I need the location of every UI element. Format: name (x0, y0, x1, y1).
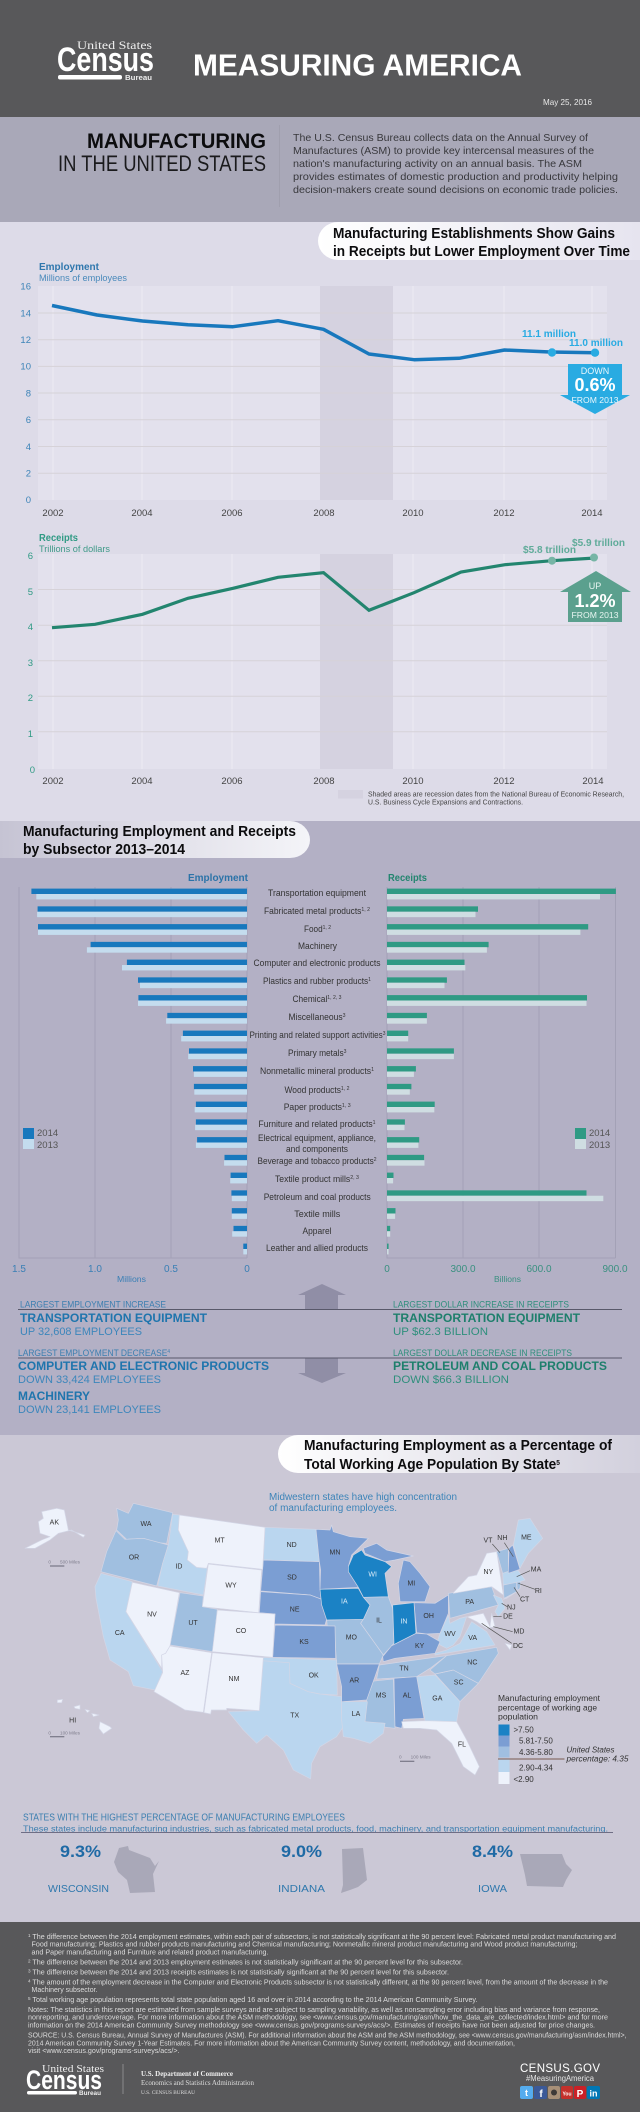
choropleth map of US states: AK (50, 1520, 59, 1527)
chart: receipts line: Trillions of dollars (39, 544, 110, 554)
map legend: 2.90-4.34 (519, 1764, 553, 1772)
choropleth map of US states: VA (468, 1635, 477, 1642)
choropleth map of US states: IA (341, 1598, 348, 1605)
choropleth map of US states: ND (287, 1542, 297, 1549)
footnotes: SOURCE: U.S. Census Bureau, Annual Survey of Manufactures (ASM). For additional information about the ASM and the ASM methodology, see <www.census.gov/manufacturing/asm/index.html>, (28, 2032, 627, 2040)
intro text: nation's manufacturing activity on an annual basis. The ASM (293, 158, 582, 170)
choropleth map of US states: WY (225, 1583, 237, 1590)
choropleth map of US states: MD (514, 1629, 524, 1636)
callouts: receipts changes: LARGEST DOLLAR DECREASE IN RECEIPTS (393, 1348, 572, 1358)
chart: receipts line: 0 (30, 765, 35, 776)
choropleth map of US states: OK (309, 1672, 319, 1679)
choropleth map of US states: MN (330, 1550, 340, 1557)
stat: Iowa: IOWA (478, 1883, 507, 1895)
legend: receipts years: 2014 (589, 1128, 610, 1139)
intro text: Manufactures (ASM) to provide key intercensal measures of the (293, 145, 594, 157)
map legend (498, 1694, 629, 1784)
stat: Indiana: INDIANA (278, 1883, 325, 1895)
stat: Wisconsin: WISCONSIN (48, 1883, 109, 1895)
intro text: provides estimates of domestic production and productivity helping (293, 171, 618, 183)
highest-share states (21, 1812, 613, 1895)
map legend: Manufacturing employment (498, 1694, 601, 1703)
footnotes: The difference between the 2014 and 2013 receipts estimates is not statistically significant at the 90 percent level for this subsector. (31, 1970, 449, 1976)
choropleth map of US states: CO (236, 1628, 247, 1635)
callouts: employment changes: COMPUTER AND ELECTRONIC PRODUCTS (18, 1359, 269, 1373)
map legend: 4.36-5.80 (519, 1748, 553, 1757)
intro heading: MANUFACTURING (87, 130, 266, 153)
subsector labels: Nonmetallic mineral products (260, 1066, 376, 1076)
choropleth map of US states: CT (520, 1596, 530, 1603)
chart: employment line: 12 (20, 335, 31, 346)
chart: receipts line: 2012 (493, 776, 515, 787)
chart: employment bars: 0 (244, 1264, 250, 1275)
footnotes (28, 1933, 627, 2055)
website and hashtag: CENSUS.GOV (520, 2063, 600, 2075)
subsector labels: 3 (383, 1031, 385, 1037)
arrow: receipts up 1.2% (560, 571, 631, 622)
subsector labels: Miscellaneous (288, 1012, 346, 1022)
footnotes: 4 (28, 1978, 31, 1984)
choropleth map of US states: ME (521, 1534, 532, 1541)
heading: subsector (0, 821, 310, 858)
chart: receipts line: 1 (28, 729, 33, 740)
chart: employment line: 2014 (581, 508, 603, 519)
subsector labels: Electrical equipment, appliance, (258, 1133, 376, 1143)
arrow: receipts up 1.2%: UP (589, 581, 601, 591)
choropleth map of US states: 0 (399, 1755, 402, 1760)
callouts: employment changes: UP 32,608 EMPLOYEES (20, 1326, 142, 1338)
chart: receipts line: 6 (28, 551, 33, 562)
callouts: employment changes: LARGEST EMPLOYMENT INCREASE (20, 1300, 166, 1310)
website and hashtag: #MeasuringAmerica (526, 2074, 595, 2083)
choropleth map of US states: MO (346, 1635, 358, 1642)
choropleth map of US states: NH (497, 1535, 507, 1542)
subsector labels: Plastics and rubber products (263, 976, 377, 986)
callouts: employment changes (18, 1300, 269, 1416)
chart: receipts line (28, 533, 625, 787)
chart: employment line: 2004 (131, 508, 153, 519)
callouts: employment changes: 4 (167, 1349, 170, 1355)
choropleth map of US states: KS (299, 1639, 309, 1646)
choropleth map of US states: UT (188, 1620, 198, 1627)
icons: social media (520, 2086, 600, 2100)
logo: Census Bureau: United States (77, 40, 153, 52)
arrow: employment down 0.6%: DOWN (581, 366, 609, 376)
chart: employment line: 2 (26, 468, 31, 480)
chart: receipts line: 2010 (402, 776, 424, 787)
chart: receipts bars: 600.0 (526, 1264, 552, 1275)
chart: employment bars: Millions (117, 1274, 146, 1284)
subsector labels: Leather and allied products (266, 1243, 368, 1253)
choropleth map of US states: NE (290, 1607, 300, 1614)
choropleth map of US states: GA (432, 1696, 443, 1703)
chart: receipts line: 4 (28, 622, 33, 633)
heading: trends: Manufacturing Establishments Show Gains (333, 226, 615, 242)
chart: receipts line: 3 (28, 658, 33, 669)
heading: map: Total Working Age Population By State (304, 1457, 571, 1473)
choropleth map of US states: VT (484, 1538, 493, 1545)
subsector labels: Transportation equipment (268, 888, 366, 898)
choropleth map of US states: OR (129, 1554, 139, 1561)
legend: employment years (23, 1128, 58, 1151)
subsector labels: Printing and related support activities (250, 1030, 397, 1040)
chart: employment line: 11.0 million (569, 338, 623, 349)
subsector labels: Beverage and tobacco products (258, 1156, 385, 1166)
choropleth map of US states: 100 Miles (60, 1731, 81, 1736)
chart: employment bars: 1.5 (12, 1264, 26, 1275)
chart: receipts line: 2 (28, 693, 33, 704)
icons: social media: in (590, 2088, 598, 2098)
choropleth map of US states: MI (407, 1580, 415, 1587)
subsector labels: Food (304, 924, 325, 934)
title: MEASURING AMERICA (193, 48, 522, 82)
callouts: employment changes: MACHINERY (18, 1389, 90, 1403)
footnotes: Notes: The statistics in this report are estimated from sample surveys and are subject to sampling variability, as well as nonsampling error including bias and variance from response, (28, 2007, 600, 2014)
choropleth map of US states: NV (147, 1612, 157, 1619)
recession legend (338, 790, 624, 806)
choropleth map of US states: AL (403, 1692, 411, 1699)
chart: employment line: 6 (26, 415, 31, 426)
subsector labels: 2 (374, 1157, 376, 1163)
logo: Census Bureau: Census (57, 41, 154, 79)
subsector labels: Paper products (284, 1102, 345, 1112)
chart: receipts line: 2014 (582, 776, 604, 787)
choropleth map of US states: 0 (48, 1560, 51, 1565)
chart: receipts line: $5.9 trillion (572, 538, 625, 549)
recession legend: U.S. Business Cycle Expansions and Contractions. (368, 800, 523, 806)
legend: receipts years: 2013 (589, 1140, 610, 1151)
map legend: percentage: 4.35 (565, 1754, 629, 1764)
subsector labels: 1, 3 (342, 1103, 351, 1109)
chart: receipts bars: Receipts (388, 872, 427, 884)
intro text (293, 132, 618, 196)
callouts: receipts changes (393, 1300, 607, 1386)
heading: subsector: Manufacturing Employment and Receipts (23, 824, 296, 840)
heading: trends: in Receipts but Lower Employment Over Time (333, 244, 630, 260)
subsector labels: Textile product mills (275, 1174, 354, 1184)
subsector labels: Wood products (284, 1085, 345, 1095)
chart: employment line: 0 (26, 495, 31, 506)
chart: receipts bars: Billions (494, 1274, 521, 1284)
callouts: employment changes: DOWN 33,424 EMPLOYEES (18, 1374, 161, 1386)
department text: U.S. Department of Commerce (141, 2070, 233, 2078)
intro heading: IN THE UNITED STATES (58, 151, 266, 176)
choropleth map of US states: SC (454, 1680, 464, 1687)
stat: Indiana (278, 1842, 367, 1895)
chart: employment line: 11.1 million (522, 329, 576, 340)
map legend: United States (566, 1746, 614, 1754)
panel: subsector bars (0, 821, 640, 1435)
choropleth map of US states: 100 Miles (411, 1755, 431, 1760)
choropleth map of US states: AR (349, 1678, 359, 1685)
choropleth map of US states: FL (458, 1742, 466, 1749)
chart: receipts line: $5.8 trillion (523, 545, 576, 556)
heading: map: Manufacturing Employment as a Percentage of (304, 1438, 612, 1454)
subsector labels: 1 (368, 977, 371, 983)
choropleth map of US states: TN (399, 1666, 409, 1673)
arrow: receipts up 1.2%: 1.2% (574, 591, 616, 611)
footnotes: nonreporting, and undercoverage. For more information about the ASM methodology, see <www.census.gov/manufacturing/asm/how_the_data_are_collected/index.html> and for more (28, 2014, 608, 2022)
footnotes: 1 (28, 1933, 31, 1938)
chart: employment line: 4 (26, 442, 31, 453)
subsector labels: Primary metals (288, 1048, 348, 1058)
choropleth map of US states: LA (352, 1711, 361, 1718)
intro band (0, 117, 640, 222)
subsector labels: Furniture and related products (258, 1119, 379, 1129)
footnotes: Food manufacturing; Plastics and rubber products manufacturing and Chemical manufacturing; Nonmetallic mineral product manufacturing and Wood product manufacturing; (32, 1942, 578, 1948)
legend: employment years: 2014 (37, 1128, 58, 1139)
choropleth map of US states: MA (531, 1566, 542, 1573)
logo: footer Census Bureau: Bureau (79, 2091, 101, 2097)
subsector labels: 1 (373, 1120, 376, 1126)
choropleth map of US states: NC (467, 1660, 477, 1667)
subsector labels: Machinery (298, 941, 337, 951)
heading: map: 5 (556, 1460, 560, 1467)
chart: employment line: 2006 (221, 508, 243, 519)
chart: employment bars (12, 872, 250, 1284)
subsector labels: Textile mills (294, 1209, 341, 1219)
chart: employment line: 2012 (493, 508, 515, 519)
icon: up arrow (298, 1284, 346, 1310)
footnotes: Total working age population represents total state population aged 16 and over in 2014 according to the 2014 American Community Survey. (31, 1997, 478, 2004)
subsector labels: 1, 2 (323, 925, 331, 931)
choropleth map of US states: DC (513, 1643, 523, 1650)
choropleth map of US states: 0 (48, 1731, 51, 1736)
intro text: The U.S. Census Bureau collects data on the Annual Survey of (293, 132, 588, 144)
choropleth map of US states: WI (368, 1572, 377, 1579)
chart: receipts line: 2006 (221, 776, 243, 787)
chart: employment line: Millions of employees (39, 273, 128, 283)
subsector labels: 3 (344, 1049, 346, 1055)
chart: employment line: Employment (39, 262, 100, 273)
chart: employment line: 2010 (402, 508, 424, 519)
header band (0, 0, 640, 117)
callouts: receipts changes: PETROLEUM AND COAL PRODUCTS (393, 1359, 607, 1373)
choropleth map of US states: WA (140, 1521, 152, 1528)
footnotes: information on the 2014 American Community Survey methodology see <www.census.gov/programs-surveys/acs/>. Estimates of receipts have not been adjusted for price changes. (28, 2022, 595, 2030)
callouts: receipts changes: DOWN $66.3 BILLION (393, 1374, 509, 1386)
chart: employment line: 10 (20, 362, 31, 372)
choropleth map of US states: CA (115, 1630, 125, 1637)
highest-share states: These states include manufacturing industries, such as fabricated metal products, food, machinery, and transportation equipment manufacturing. (23, 1824, 608, 1834)
chart: receipts line: 2004 (131, 776, 153, 787)
legend: employment years: 2013 (37, 1140, 58, 1151)
recession legend: Shaded areas are recession dates from the National Bureau of Economic Research, (368, 792, 624, 798)
date: May 25, 2016 (543, 97, 592, 107)
department text (141, 2070, 254, 2096)
choropleth map of US states: SD (287, 1574, 297, 1581)
chart: receipts bars (384, 872, 628, 1284)
choropleth map of US states: IL (376, 1618, 382, 1625)
heading: subsector: by Subsector 2013–2014 (23, 842, 185, 858)
subsector labels: Petroleum and coal products (264, 1192, 371, 1202)
chart: employment bars: Employment (188, 872, 248, 884)
intro text: decision-makers create sound decisions on economic trade policies. (293, 184, 618, 196)
footnotes: Machinery subsector. (32, 1987, 98, 1994)
chart: employment bars: 0.5 (164, 1264, 178, 1275)
panel: state map (0, 1435, 640, 1922)
choropleth map of US states: MS (376, 1693, 387, 1700)
chart: receipts bars: 300.0 (450, 1264, 476, 1275)
footnotes: visit <www.census.gov/programs-surveys/acs/>. (28, 2048, 180, 2055)
department text: U.S. CENSUS BUREAU (141, 2090, 195, 2096)
icon: down arrow (298, 1358, 346, 1383)
callouts: employment changes: LARGEST EMPLOYMENT DECREASE (18, 1348, 177, 1358)
icons: social media: t (525, 2088, 528, 2098)
footer (0, 1922, 640, 2112)
choropleth map of US states: TX (290, 1713, 299, 1720)
map legend: 5.81-7.50 (519, 1736, 553, 1746)
stat: Wisconsin (48, 1842, 159, 1895)
chart: receipts bars: 0 (384, 1264, 390, 1275)
choropleth map of US states: OH (423, 1613, 434, 1620)
choropleth map of US states: MT (215, 1537, 225, 1544)
choropleth map of US states: PA (465, 1599, 474, 1606)
footnotes: 5 (28, 1996, 31, 2001)
arrow: receipts up 1.2%: FROM 2013 (572, 610, 619, 620)
map legend: percentage of working age (498, 1704, 598, 1712)
choropleth map of US states: 500 Miles (60, 1560, 81, 1565)
footnotes: The difference between the 2014 employment estimates, within each pair of subsectors, is not statistically significant at the 90 percent level: Fabricated metal product manufacturing and (31, 1934, 616, 1941)
choropleth map of US states: AZ (181, 1670, 190, 1677)
footnotes: 2014 American Community Survey 1-Year Estimates. For more information about the American Community Survey content, methodology, and documentation, (28, 2040, 515, 2048)
choropleth map of US states: NJ (507, 1605, 516, 1612)
subsector labels: 1 (371, 1067, 374, 1073)
footnotes: and Paper manufacturing and Furniture and related product manufacturing. (32, 1950, 269, 1956)
logo: Census Bureau: Bureau (125, 73, 152, 82)
choropleth map of US states: RI (535, 1588, 542, 1595)
map legend: population (498, 1712, 538, 1722)
logo: footer Census Bureau: Census (26, 2065, 102, 2095)
chart: receipts line: Receipts (39, 533, 78, 544)
heading: trends (318, 222, 640, 260)
chart: employment line: 16 (20, 282, 31, 292)
department text: Economics and Statistics Administration (141, 2079, 254, 2087)
stat: Iowa: 8.4% (472, 1842, 513, 1861)
panel: trends over time (0, 222, 640, 821)
callouts: employment changes: TRANSPORTATION EQUIPMENT (20, 1311, 208, 1325)
chart: employment line: 14 (20, 308, 31, 320)
choropleth map of US states: HI (69, 1717, 76, 1724)
chart: receipts line: 2008 (313, 776, 335, 787)
map legend: <2.90 (514, 1775, 534, 1784)
subsector labels (250, 888, 385, 1253)
icons: social media: P (577, 2089, 584, 2100)
subsector labels: Fabricated metal products (264, 906, 368, 916)
chart: employment line: 2002 (42, 508, 64, 519)
subsector labels: 1, 2 (341, 1086, 350, 1092)
chart: employment line: 2008 (313, 508, 335, 519)
stat: Indiana: 9.0% (281, 1842, 322, 1861)
chart: receipts line: 5 (28, 587, 33, 598)
subsector labels: Computer and electronic products (254, 958, 381, 968)
callouts: receipts changes: TRANSPORTATION EQUIPMENT (393, 1311, 581, 1325)
icons: social media: f (539, 2089, 543, 2100)
legend: receipts years (575, 1128, 610, 1151)
icons: social media: You (562, 2092, 572, 2098)
choropleth map of US states: NM (229, 1676, 240, 1683)
footnotes: The amount of the employment decrease in the Computer and Electronic Products subsector is not statistically different, at the 90 percent level, from the amount of the decrease in the (31, 1980, 608, 1986)
subsector labels: 1, 2, 3 (327, 995, 342, 1001)
choropleth map of US states: IN (400, 1618, 407, 1625)
footnotes: 3 (28, 1968, 31, 1974)
footnotes: 2 (28, 1958, 31, 1964)
callouts: receipts changes: UP $62.3 BILLION (393, 1326, 488, 1338)
chart: employment line: 8 (26, 388, 31, 400)
arrow: employment down 0.6% (560, 364, 630, 414)
choropleth map of US states: KY (415, 1643, 425, 1650)
subsector labels: 2, 3 (350, 1175, 359, 1181)
stat: Wisconsin: 9.3% (60, 1842, 101, 1861)
chart: employment line (20, 262, 623, 519)
subsector labels: Chemical (292, 994, 330, 1004)
choropleth map of US states: ID (175, 1564, 182, 1571)
stat: Iowa (472, 1842, 572, 1895)
arrow: employment down 0.6%: FROM 2013 (572, 395, 619, 405)
map annotation: of manufacturing employees. (269, 1503, 397, 1514)
subsector labels: Apparel (302, 1226, 332, 1236)
chart: employment bars: 1.0 (88, 1264, 102, 1275)
chart: receipts bars: 900.0 (602, 1264, 628, 1275)
highest-share states: STATES WITH THE HIGHEST PERCENTAGE OF MANUFACTURING EMPLOYEES (23, 1812, 345, 1824)
subsector labels: 1, 2 (361, 907, 370, 913)
heading: map (278, 1435, 640, 1473)
subsector labels: 3 (343, 1013, 346, 1019)
callouts: employment changes: DOWN 23,141 EMPLOYEES (18, 1404, 161, 1416)
footnotes: The difference between the 2014 and 2013 employment estimates is not statistically significant at the 90 percent level for this subsector. (31, 1960, 463, 1966)
callouts: receipts changes: LARGEST DOLLAR INCREASE IN RECEIPTS (393, 1300, 569, 1310)
map annotation: Midwestern states have high concentration (269, 1492, 457, 1503)
map annotation (269, 1492, 457, 1514)
subsector labels: and components (286, 1144, 348, 1154)
arrow: employment down 0.6%: 0.6% (574, 375, 616, 395)
choropleth map of US states: WV (444, 1631, 456, 1638)
choropleth map of US states: DE (503, 1614, 513, 1621)
choropleth map of US states: NY (483, 1569, 494, 1576)
chart: receipts line: 2002 (42, 776, 64, 787)
intro heading (58, 130, 266, 176)
map legend: >7.50 (514, 1726, 534, 1734)
choropleth map of US states (25, 1503, 543, 1779)
logo: footer Census Bureau: United States (42, 2064, 104, 2075)
website and hashtag (520, 2063, 600, 2083)
